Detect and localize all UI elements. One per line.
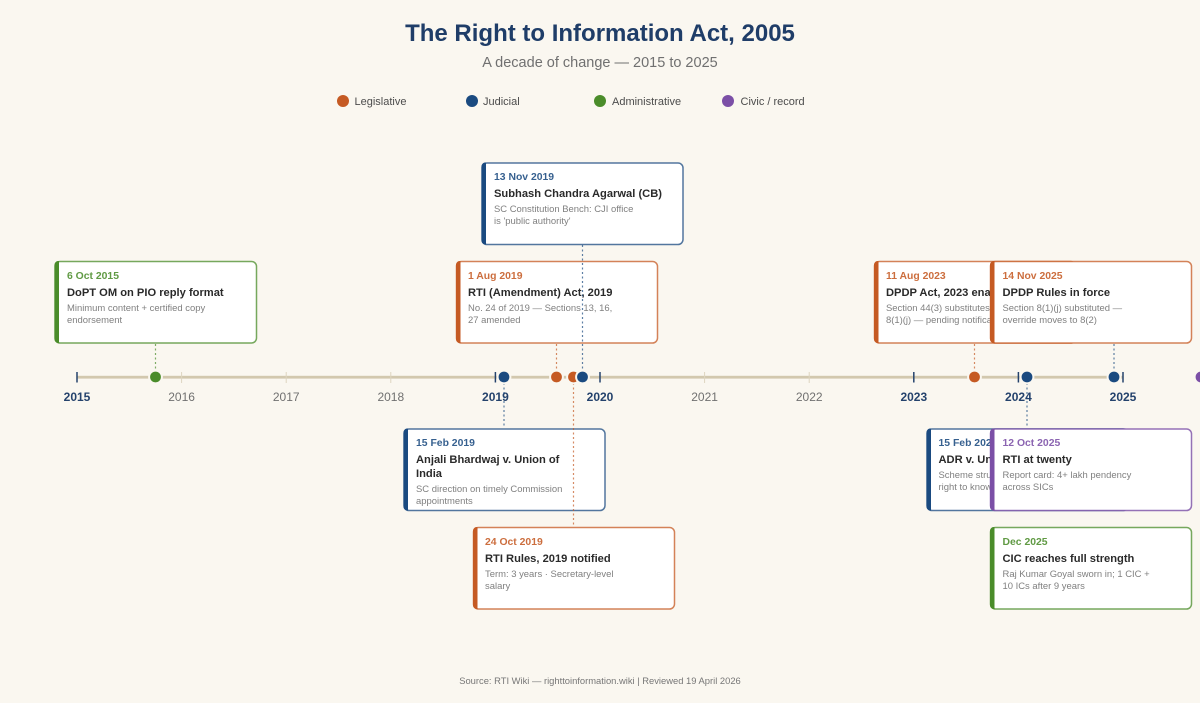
card: RTI Rules: Term: 3 years · Secretary-level	[485, 569, 614, 580]
legend: judicial: Judicial	[483, 96, 520, 108]
card: Subhash Chandra Agarwal	[481, 162, 683, 245]
card: CIC full strength: CIC reaches full strength	[1002, 553, 1135, 565]
year labels: 2016	[168, 390, 195, 404]
card: Subhash Chandra Agarwal: is 'public authority'	[494, 216, 571, 227]
timeline axis	[77, 372, 1123, 383]
card: DoPT OM: endorsement	[67, 315, 122, 326]
card: RTI at twenty: 12 Oct 2025	[1002, 438, 1060, 449]
year labels: 2019	[482, 390, 509, 404]
year labels: 2022	[796, 390, 823, 404]
legend: legislative	[337, 95, 406, 108]
legend: judicial	[466, 95, 520, 108]
card: RTI Rules: 24 Oct 2019	[485, 537, 543, 548]
card: Subhash Chandra Agarwal: Subhash Chandra Agarwal (CB)	[494, 188, 662, 200]
year labels: 2024	[1005, 390, 1032, 404]
card: DoPT OM: Minimum content + certified copy	[67, 303, 205, 314]
subtitle: A decade of change — 2015 to 2025	[482, 55, 718, 71]
card: CIC full strength: Raj Kumar Goyal sworn in; 1 CIC +	[1002, 569, 1150, 580]
year labels: 2018	[377, 390, 404, 404]
year labels	[64, 390, 1137, 404]
card: ADR v. Union: ADR v. Union of India	[938, 454, 1052, 466]
card: DPDP Rules: Section 8(1)(j) substituted —	[1002, 303, 1123, 314]
card: DoPT OM: DoPT OM on PIO reply format	[67, 287, 224, 299]
card: Anjali Bhardwaj: 15 Feb 2019	[416, 438, 475, 449]
card: ADR v. Union: Scheme struck down:	[938, 470, 1029, 481]
card: RTI at twenty: RTI at twenty	[1002, 454, 1073, 466]
card: RTI Rules: RTI Rules, 2019 notified	[485, 553, 611, 565]
card: RTI at twenty: Report card: 4+ lakh pendency	[1002, 470, 1132, 481]
card: DPDP Act: 8(1)(j) — pending notification	[886, 315, 1007, 326]
card: RTI at twenty	[990, 428, 1192, 511]
card: DoPT OM: 6 Oct 2015	[67, 271, 119, 282]
year labels: 2023	[900, 390, 927, 404]
card: RTI Amendment Act: RTI (Amendment) Act, 2019	[468, 287, 612, 299]
legend: administrative: Administrative	[612, 96, 681, 108]
legend: legislative: Legislative	[354, 96, 406, 108]
year labels: 2021	[691, 390, 718, 404]
card: ADR v. Union: 15 Feb 2024	[938, 438, 998, 449]
card: RTI Amendment Act: 1 Aug 2019	[468, 271, 523, 282]
year labels: 2015	[64, 390, 91, 404]
card: ADR v. Union: right to know	[938, 482, 992, 493]
card: RTI at twenty: across SICs	[1002, 482, 1054, 493]
card: DPDP Rules: override moves to 8(2)	[1002, 315, 1097, 326]
title: The Right to Information Act, 2005	[405, 20, 795, 47]
card: DPDP Rules: DPDP Rules in force	[1002, 287, 1110, 299]
card: DPDP Rules: 14 Nov 2025	[1002, 271, 1063, 282]
legend: civic: Civic / record	[740, 96, 805, 108]
connector lines	[156, 245, 1114, 526]
card: Anjali Bhardwaj	[403, 428, 605, 511]
card: ADR v. Union	[926, 428, 1128, 511]
year labels: 2025	[1110, 390, 1137, 404]
card: Anjali Bhardwaj: India	[416, 468, 443, 480]
card: Anjali Bhardwaj: SC direction on timely Commission	[416, 484, 562, 495]
card: Subhash Chandra Agarwal: SC Constitution Bench: CJI office	[494, 204, 633, 215]
card: DoPT OM	[54, 261, 256, 343]
year labels: 2020	[587, 390, 614, 404]
source footer: Source: RTI Wiki — righttoinformation.wiki | Reviewed 19 April 2026	[459, 675, 741, 686]
card: DPDP Act: Section 44(3) substitutes	[886, 303, 990, 314]
year labels: 2017	[273, 390, 300, 404]
card: CIC full strength: Dec 2025	[1002, 537, 1048, 548]
card: DPDP Act: DPDP Act, 2023 enacted	[886, 287, 1014, 299]
card: CIC full strength: 10 ICs after 9 years	[1002, 581, 1085, 592]
card: DPDP Act: 11 Aug 2023	[886, 271, 946, 282]
event markers	[149, 371, 1200, 383]
card: Anjali Bhardwaj: appointments	[416, 496, 473, 507]
card: Anjali Bhardwaj: Anjali Bhardwaj v. Union of	[416, 454, 560, 466]
card: DPDP Rules	[990, 261, 1192, 343]
card: CIC full strength	[990, 527, 1192, 609]
card: RTI Amendment Act	[456, 261, 658, 343]
legend	[337, 95, 805, 108]
card: Subhash Chandra Agarwal: 13 Nov 2019	[494, 172, 554, 183]
card: RTI Amendment Act: 27 amended	[468, 315, 520, 326]
card: RTI Amendment Act: No. 24 of 2019 — Sections 13, 16,	[468, 303, 612, 314]
card: RTI Rules	[473, 527, 674, 609]
card: RTI Rules: salary	[485, 581, 510, 592]
card: DPDP Act	[874, 261, 1076, 343]
